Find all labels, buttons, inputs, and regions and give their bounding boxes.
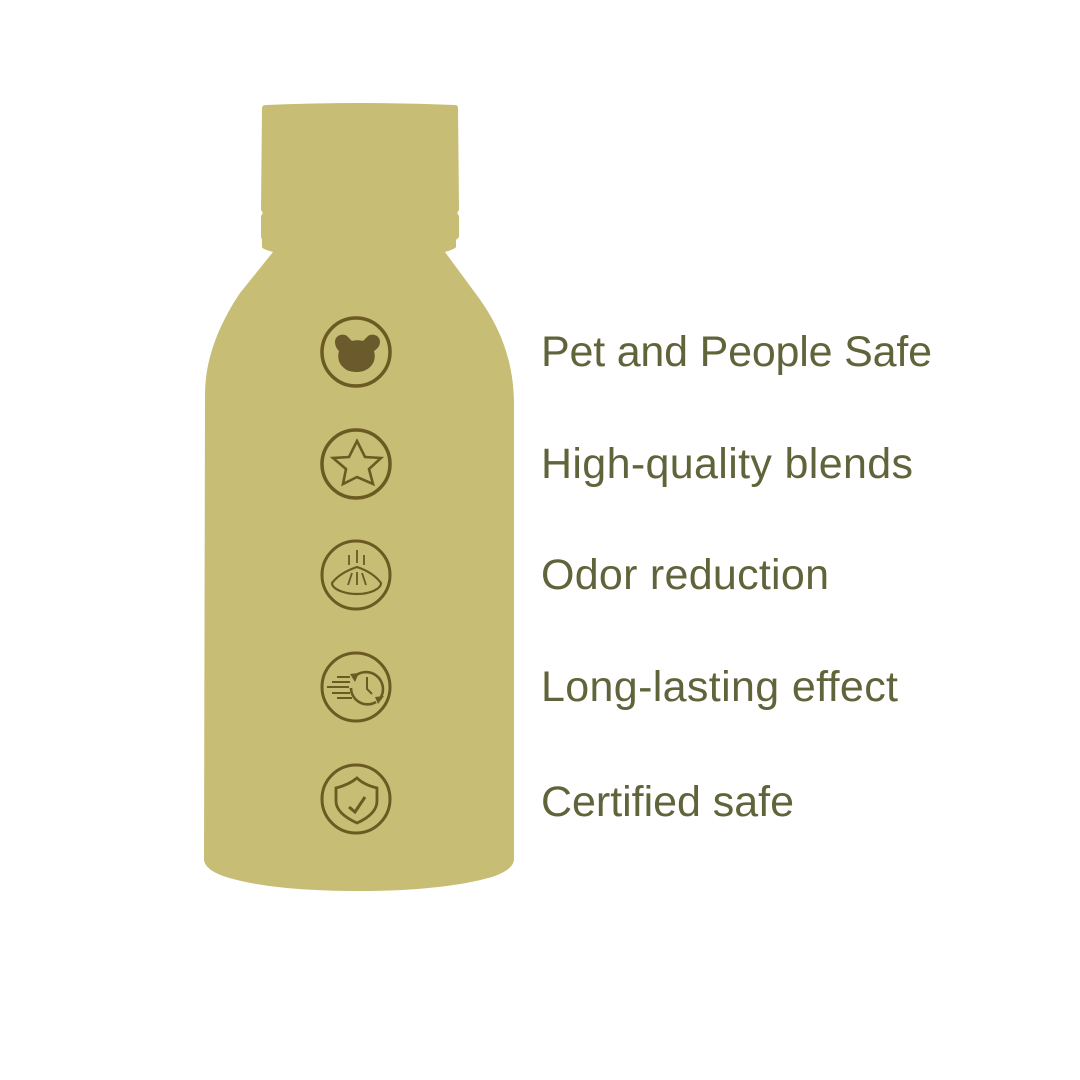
- icon: star: [322, 430, 390, 498]
- label: odor reduction: Odor reduction: [541, 551, 829, 599]
- icon: odor reduction: [322, 541, 390, 609]
- label: long-lasting effect: Long-lasting effect: [541, 663, 898, 711]
- label: pet and people safe: Pet and People Safe: [541, 328, 932, 376]
- icon: long-lasting clock: [322, 653, 390, 721]
- label: high-quality blends: High-quality blends: [541, 440, 913, 488]
- bottle silhouette: [204, 103, 514, 891]
- label: certified safe: Certified safe: [541, 778, 794, 826]
- icon: pet face: [322, 318, 390, 386]
- icon: shield check: [322, 765, 390, 833]
